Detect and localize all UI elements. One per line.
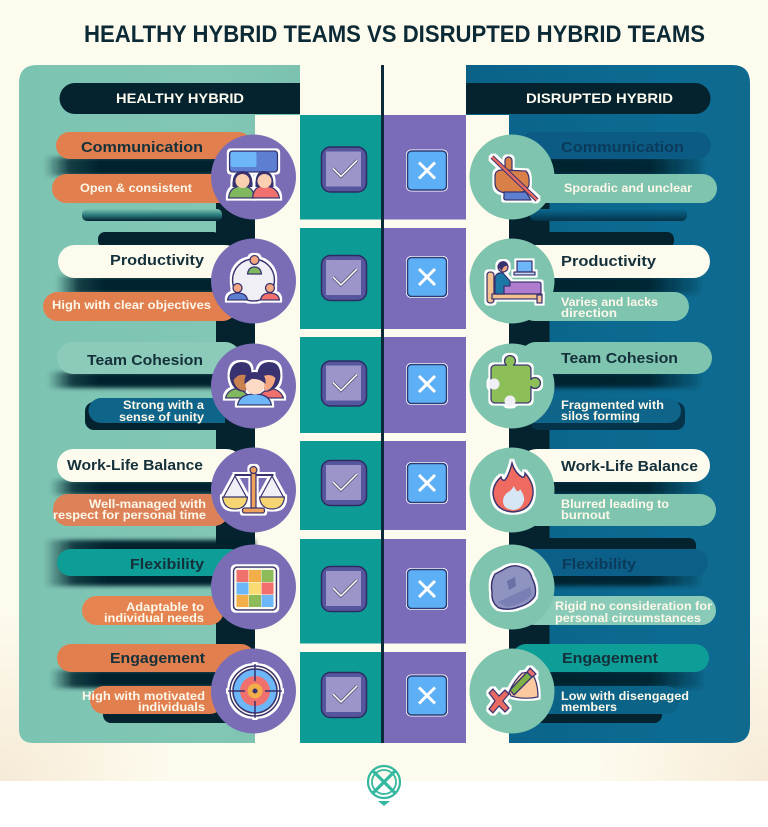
icon: cross box 3: [406, 363, 448, 405]
heading: healthy hybrid: HEALTHY HYBRID: [116, 90, 244, 106]
row: communication healthy: [44, 132, 252, 248]
description: Low with disengaged: [561, 689, 689, 703]
description: Well-managed with: [89, 497, 206, 511]
panel: healthy hybrid background: [19, 65, 300, 743]
icon: crossed hand: [470, 134, 554, 220]
heading: disrupted hybrid: DISRUPTED HYBRID: [526, 90, 673, 106]
description: Strong with a: [123, 398, 204, 412]
description: individual needs: [104, 611, 204, 625]
row: productivity disrupted: [520, 245, 710, 321]
icon: check box 3: [322, 361, 366, 406]
icon: productivity network: [211, 238, 296, 324]
row: flexibility disrupted: [509, 538, 716, 625]
description: Sporadic and unclear: [564, 181, 692, 195]
row: flexibility healthy: [44, 540, 255, 625]
description: silos forming: [561, 409, 640, 423]
label: Flexibility: [130, 556, 205, 573]
icon: team heads: [211, 344, 296, 428]
description: Fragmented with: [561, 398, 664, 412]
icon: balance scale: [211, 448, 296, 532]
icon: check box 5: [322, 566, 366, 612]
row: team cohesion disrupted: [520, 342, 712, 430]
icon: laptop in bed: [470, 238, 554, 324]
logo: [368, 766, 400, 806]
label: Team Cohesion: [87, 352, 203, 369]
description: Adaptable to: [126, 600, 204, 614]
icon: cross box 1: [406, 150, 448, 192]
row: team cohesion healthy: [48, 342, 241, 430]
row: productivity healthy: [43, 245, 242, 321]
column: healthy check tiles: [300, 115, 381, 743]
label: Communication: [561, 139, 684, 156]
label: Productivity: [561, 253, 657, 270]
column: disrupted cross tiles: [384, 115, 466, 743]
centre divider: [381, 65, 384, 743]
panel: disrupted hybrid background: [466, 65, 750, 743]
description: burnout: [561, 508, 610, 522]
icon: target: [211, 648, 296, 734]
icon: check box 4: [322, 460, 366, 506]
description: Varies and lacks: [561, 295, 658, 309]
row: engagement healthy: [50, 644, 255, 723]
icon: cross box 5: [406, 568, 448, 610]
icon: check box 2: [322, 256, 366, 300]
icon: check box 1: [322, 147, 366, 192]
label: Work-Life Balance: [561, 458, 698, 475]
heading: healthy hybrid: [59, 83, 300, 114]
icon: rock: [470, 544, 554, 630]
icon: pencil and cross: [470, 648, 554, 734]
description: Open & consistent: [80, 181, 192, 195]
row: communication disrupted: [520, 132, 717, 248]
description: Blurred leading to: [561, 497, 669, 511]
description: members: [561, 700, 617, 714]
left dark column: [216, 203, 255, 723]
row: work-life balance healthy: [50, 449, 243, 526]
icon: cross box 4: [406, 462, 448, 504]
description: High with motivated: [82, 689, 205, 703]
label: Team Cohesion: [561, 350, 678, 367]
icon: cross box 2: [406, 256, 448, 298]
right dark column: [509, 203, 550, 700]
label: Work-Life Balance: [67, 457, 203, 474]
row: engagement disrupted: [512, 644, 709, 723]
icon: puzzle piece: [470, 344, 554, 428]
icon: cross box 6: [406, 674, 448, 716]
description: individuals: [138, 700, 205, 714]
description: sense of unity: [119, 410, 204, 424]
description: High with clear objectives: [52, 298, 211, 312]
icon: colour grid: [211, 544, 296, 630]
row: work-life balance disrupted: [520, 449, 716, 526]
icon: flame: [470, 448, 554, 532]
label: Flexibility: [562, 556, 637, 573]
description: Rigid no consideration for: [555, 599, 712, 613]
label: Productivity: [110, 252, 205, 269]
description: respect for personal time: [53, 508, 206, 522]
label: Engagement: [110, 650, 205, 667]
description: personal circumstances: [555, 611, 701, 625]
icon: check box 6: [322, 672, 366, 718]
description: direction: [561, 306, 617, 320]
icon: communication people: [211, 134, 296, 220]
heading: disrupted hybrid: [466, 83, 710, 114]
title: HEALTHY HYBRID TEAMS VS DISRUPTED HYBRID TEAMS: [84, 21, 705, 48]
label: Communication: [81, 139, 203, 156]
label: Engagement: [562, 650, 658, 667]
